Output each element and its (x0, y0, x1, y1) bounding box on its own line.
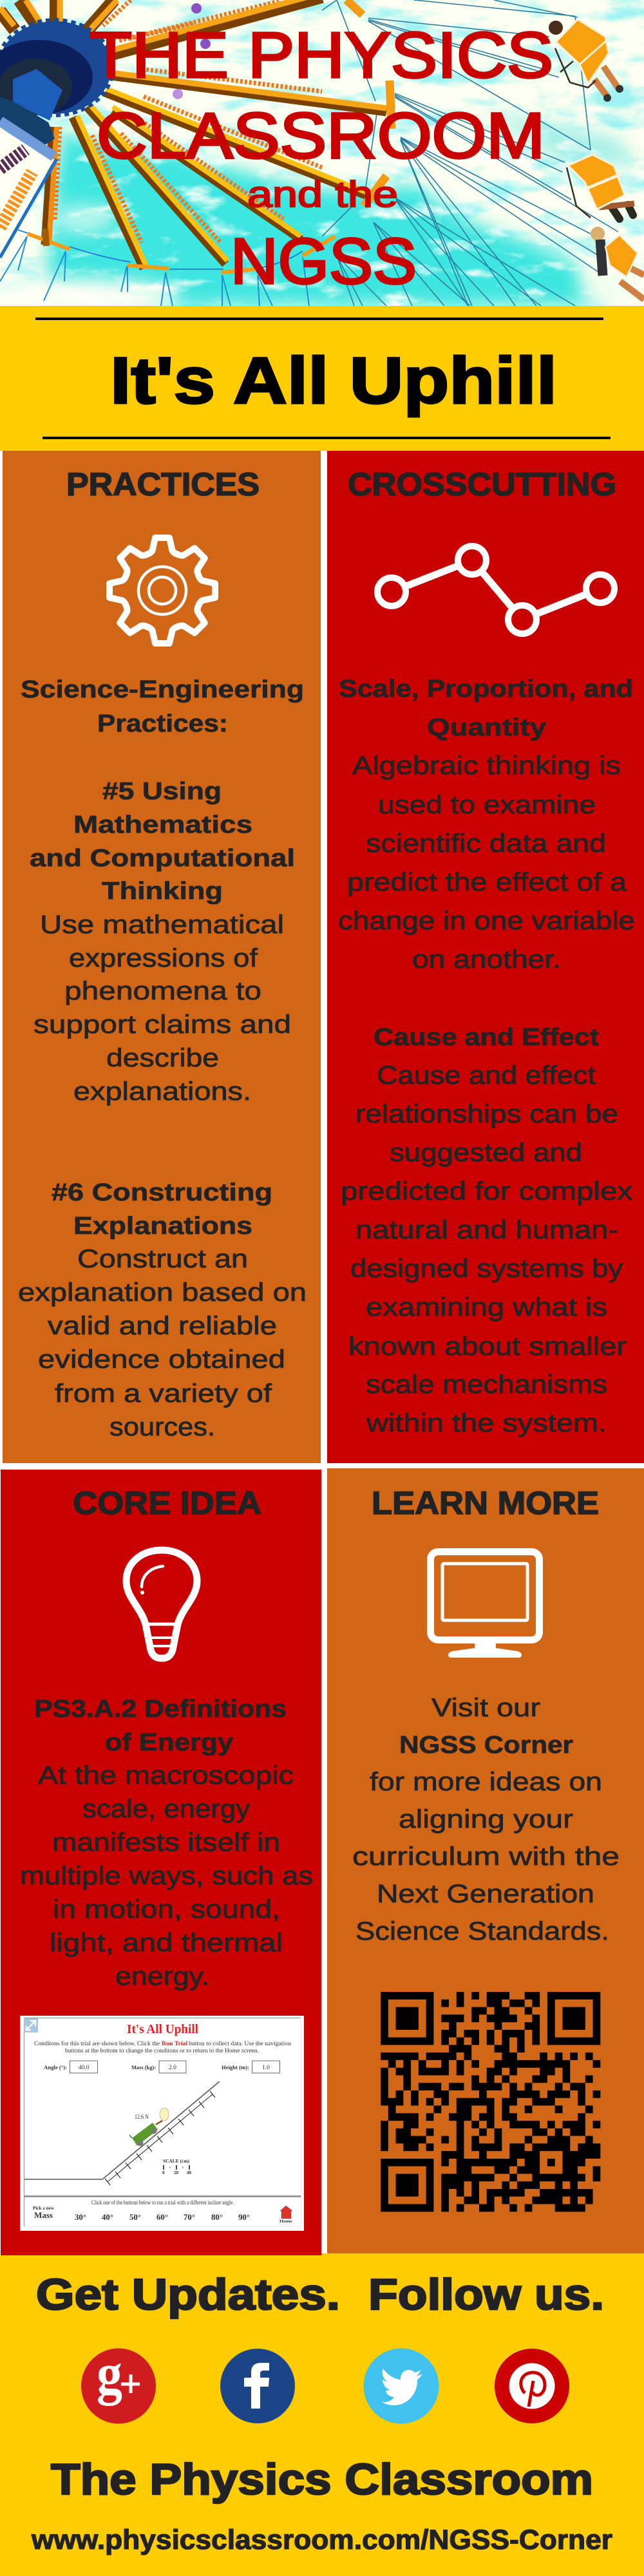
panel: practices (3, 451, 321, 1463)
heading: practices: PRACTICES (66, 466, 260, 502)
simulation screenshot: Angle (°): (44, 2065, 67, 2070)
text: practice 5: #5 Using (102, 778, 222, 805)
text: scale, proportion, and quantity: Scale, Proportion, and (339, 676, 633, 703)
text: scale, proportion, and quantity: change in one variable (338, 907, 635, 935)
text: PS3.A.2 definitions of energy: multiple ways, such as (20, 1862, 313, 1890)
simulation screenshot: Pick a new (33, 2206, 55, 2211)
simulation screenshot: Conditons for this trial are shown below. Click the (34, 2040, 160, 2047)
text: visit our NGSS corner: curriculum with the (352, 1842, 620, 1871)
text: cause and effect: relationships can be (355, 1100, 618, 1128)
text: PS3.A.2 definitions of energy: scale, energy (82, 1795, 250, 1823)
text: PS3.A.2 definitions of energy: PS3.A.2 Definitions (34, 1696, 287, 1723)
simulation screenshot: 70° (184, 2212, 195, 2222)
text: PS3.A.2 definitions of energy (20, 1696, 313, 1991)
text: practice 6: explanation based on (18, 1278, 307, 1307)
text: get updates, follow us: Get Updates. (36, 2270, 340, 2319)
icon: google plus (81, 2342, 156, 2424)
main title (90, 19, 553, 298)
ornaments (191, 3, 202, 14)
text: practice 5: describe (106, 1044, 219, 1072)
text: cause and effect: within the system. (366, 1409, 607, 1437)
heading: learn more: LEARN MORE (372, 1485, 599, 1521)
text: practice 6: sources. (109, 1413, 215, 1441)
text: scale, proportion, and quantity: scientific data and (366, 829, 606, 858)
text: scale, proportion, and quantity: Quantity (427, 714, 546, 741)
text: science-engineering practices: Practices: (97, 710, 228, 737)
panel: crosscutting (327, 451, 644, 1463)
main title: and the (247, 174, 398, 215)
text: get updates, follow us: Follow us. (368, 2270, 604, 2319)
text: cause and effect: known about smaller (348, 1332, 627, 1361)
simulation screenshot (20, 2016, 304, 2231)
text: practice 5: Mathematics (73, 811, 252, 838)
text: PS3.A.2 definitions of energy: light, and thermal (50, 1929, 283, 1957)
simulation screenshot: 0 (162, 2170, 165, 2175)
text: cause and effect: designed systems by (350, 1255, 623, 1283)
simulation screenshot: Mass (kg): (131, 2065, 156, 2070)
text: practice 5: explanations. (73, 1077, 251, 1106)
text: practice 5: expressions of (69, 944, 258, 972)
simulation screenshot: 12.6 N (135, 2114, 149, 2121)
text: practice 5: Use mathematical (40, 911, 284, 939)
text: cause and effect: predicted for complex (341, 1177, 632, 1206)
simulation screenshot: SCALE (cm) (163, 2158, 189, 2164)
simulation screenshot: 60° (156, 2212, 168, 2222)
main title: CLASSROOM (97, 100, 545, 172)
text: cause and effect: suggested and (390, 1139, 582, 1167)
spokes (0, 0, 392, 272)
text: cause and effect: scale mechanisms (366, 1370, 607, 1399)
icon: pinterest (495, 2349, 569, 2423)
main title: NGSS (231, 225, 417, 298)
text: PS3.A.2 definitions of energy: manifests itself in (52, 1828, 280, 1857)
text: PS3.A.2 definitions of energy: energy. (115, 1962, 209, 1991)
text: practice 6 (18, 1179, 307, 1441)
text: scale, proportion, and quantity: Algebraic thinking is (352, 752, 621, 780)
text: the physics classroom: The Physics Classroom (51, 2455, 593, 2504)
text: cause and effect: natural and human- (355, 1216, 618, 1244)
simulation screenshot: 30° (75, 2212, 86, 2222)
text: cause and effect: Cause and Effect (374, 1024, 599, 1051)
text: cause and effect: Cause and effect (377, 1061, 596, 1090)
left white booth (0, 129, 54, 256)
heading: crosscutting: CROSSCUTTING (348, 466, 616, 502)
hub (0, 21, 111, 114)
simulation screenshot: 40° (102, 2212, 113, 2222)
simulation screenshot: It's All Uphill (127, 2022, 198, 2036)
text: practice 5 (30, 778, 295, 1106)
simulation screenshot: button to collect data. Use the navigation (189, 2041, 291, 2047)
text: practice 5: support claims and (33, 1010, 291, 1039)
icon: facebook (220, 2349, 295, 2423)
footer panel (0, 2253, 644, 2576)
simulation screenshot: 50° (129, 2212, 141, 2222)
icon: google plus: g (97, 2342, 122, 2406)
text: cause and effect (341, 1024, 632, 1437)
text: scale, proportion, and quantity (338, 676, 635, 974)
banner: It's All Uphill (0, 306, 644, 451)
text: scale, proportion, and quantity: predict the effect of a (347, 868, 627, 896)
text: get updates, follow us (36, 2270, 604, 2319)
text: practice 5: and Computational (30, 845, 295, 872)
simulation screenshot: 1.0 (262, 2065, 270, 2071)
text: science-engineering practices: Science-Engineering (21, 676, 304, 703)
text: PS3.A.2 definitions of energy: in motion, sound, (53, 1895, 280, 1924)
icon: gear (109, 538, 215, 643)
simulation screenshot: 2.0 (169, 2065, 176, 2071)
icon: twitter (363, 2348, 439, 2424)
text: PS3.A.2 definitions of energy: of Energy (105, 1729, 233, 1756)
text: visit our NGSS corner (352, 1694, 620, 1946)
text: practice 5: phenomena to (64, 977, 261, 1005)
text: visit our NGSS corner: for more ideas on (370, 1768, 602, 1796)
heading: core idea: CORE IDEA (73, 1485, 261, 1521)
text: visit our NGSS corner: Science Standards. (355, 1917, 609, 1946)
text: visit our NGSS corner: aligning your (399, 1805, 573, 1833)
text: website url: www.physicsclassroom.com/NGSS-Corner (31, 2524, 612, 2555)
simulation screenshot: 80° (211, 2212, 223, 2222)
panel: learn more (327, 1468, 644, 2254)
simulation screenshot: 90° (238, 2212, 250, 2222)
panel: core idea (1, 1470, 321, 2255)
simulation screenshot: buttons at the bottom to change the conditons or to return to the Home screen. (65, 2048, 259, 2054)
text: practice 6: Explanations (73, 1213, 252, 1240)
main title: THE PHYSICS (90, 19, 553, 91)
text: practice 6: Construct an (77, 1245, 248, 1273)
simulation screenshot: Click one of the buttons below to run a trial with a different incline angle. (91, 2199, 234, 2206)
text: visit our NGSS corner: NGSS Corner (399, 1732, 573, 1759)
swing wires (322, 0, 618, 306)
text: scale, proportion, and quantity: on another. (412, 945, 561, 974)
simulation screenshot: 20 (174, 2170, 179, 2175)
text: scale, proportion, and quantity: used to examine (378, 791, 596, 819)
icon: computer monitor (430, 1552, 540, 1658)
text: practice 6: valid and reliable (48, 1312, 277, 1340)
text: practice 6: from a variety of (55, 1379, 272, 1408)
simulation screenshot: 40.0 (79, 2065, 90, 2071)
banner: It's All Uphill: It's All Uphill (110, 344, 557, 417)
text: visit our NGSS corner: Visit our (431, 1694, 540, 1722)
text: practice 6: #6 Constructing (52, 1179, 272, 1206)
icon: light bulb (126, 1550, 197, 1658)
simulation screenshot: Mass (34, 2210, 53, 2220)
text: cause and effect: examining what is (366, 1293, 607, 1321)
QR code (381, 1992, 600, 2211)
text: practice 6: evidence obtained (38, 1345, 285, 1374)
text: PS3.A.2 definitions of energy: At the macroscopic (38, 1761, 294, 1790)
swing seats with riders (549, 19, 644, 299)
text: visit our NGSS corner: Next Generation (377, 1880, 594, 1908)
simulation screenshot: Height (m): (222, 2065, 249, 2070)
simulation screenshot: Run Trial (162, 2041, 187, 2047)
text: practice 5: Thinking (102, 878, 223, 905)
simulation screenshot: 40 (187, 2170, 192, 2175)
icon: line chart (377, 546, 614, 634)
text: science-engineering practices (21, 676, 304, 737)
simulation screenshot: Home (279, 2219, 292, 2224)
